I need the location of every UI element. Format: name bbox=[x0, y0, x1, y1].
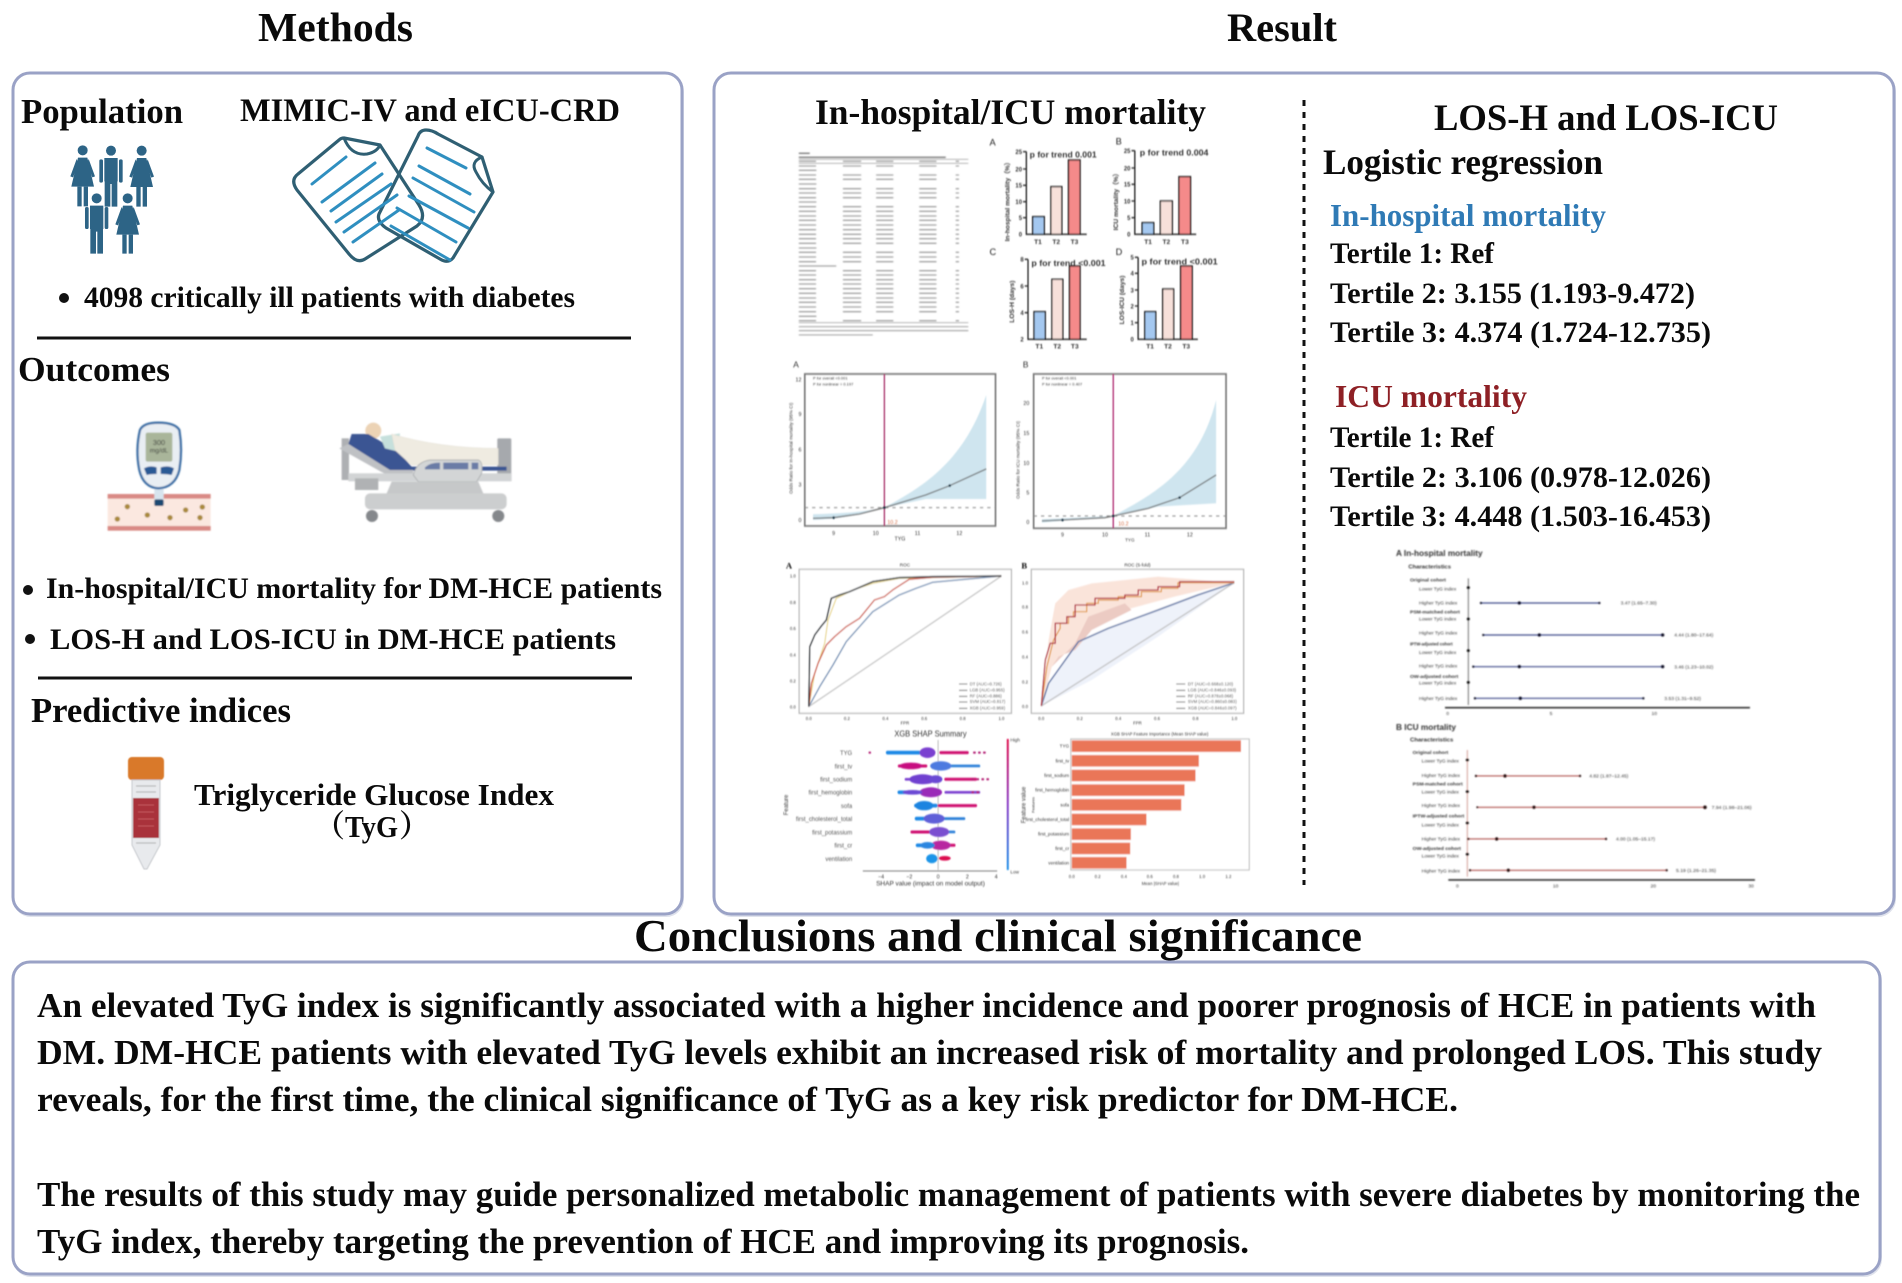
chart: ROC B: 0.6 bbox=[1022, 629, 1029, 634]
chart: restricted cubic spline A: A bbox=[793, 359, 799, 369]
chart: restricted cubic spline A: P for overall <0.001 bbox=[813, 375, 848, 380]
chart: ROC A bbox=[786, 560, 1011, 726]
chart: forest plot B ICU mortality: Characteristics bbox=[1410, 737, 1453, 743]
bar chart D: 3 bbox=[1131, 288, 1134, 294]
text block: in-hospital mortality results bbox=[1330, 197, 1711, 349]
chart: ROC B: 0.2 bbox=[1077, 716, 1083, 721]
chart: forest plot A in-hospital mortality: 0 bbox=[1446, 711, 1449, 717]
chart: tertile bars bbox=[990, 137, 1218, 351]
chart: ROC A: 0.4 bbox=[882, 716, 889, 721]
chart: ROC B: 0.8 bbox=[1193, 716, 1199, 721]
chart: SHAP summary: sofa bbox=[841, 804, 853, 810]
chart: restricted cubic spline B: B bbox=[1023, 359, 1029, 369]
chart: forest plot B ICU mortality: 4.00 (1.05–15.17) bbox=[1616, 837, 1655, 843]
text block: ICU mortality results: ICU mortality bbox=[1335, 378, 1527, 414]
icon: documents bbox=[294, 130, 493, 261]
chart: SHAP summary: 0 bbox=[937, 875, 940, 881]
text block: conclusion paragraph 1: reveals, for the first time, the clinical significance of TyG as a key risk predictor for DM-HCE. bbox=[37, 1080, 1458, 1119]
chart: forest plot B ICU mortality: Higher TyG index bbox=[1422, 803, 1460, 809]
chart: restricted cubic spline B: 10 bbox=[1023, 461, 1029, 467]
chart: ROC B: 0.4 bbox=[1022, 654, 1029, 659]
chart: restricted cubic spline A bbox=[789, 359, 996, 543]
chart: ROC A: 0.2 bbox=[844, 716, 850, 721]
chart: SHAP summary: Feature bbox=[784, 794, 790, 815]
chart: forest plot A in-hospital mortality: 5 bbox=[1550, 711, 1553, 717]
bar chart B: T1 bbox=[1144, 239, 1152, 246]
bar chart A: 5 bbox=[1019, 216, 1023, 222]
chart: SHAP feature importance: first_sodium bbox=[1044, 773, 1069, 778]
chart: SHAP summary: Feature value bbox=[1021, 786, 1027, 823]
chart: restricted cubic spline A: 9 bbox=[799, 412, 801, 418]
bar chart C: 8 bbox=[1020, 258, 1024, 264]
chart: tertile bars: A bbox=[990, 137, 997, 147]
chart: forest plot A in-hospital mortality bbox=[1396, 549, 1750, 717]
bar chart A: 25 bbox=[1015, 150, 1023, 156]
chart: SHAP summary: first_potassium bbox=[812, 830, 852, 836]
bullet: cohort size: 4098 critically ill patients with diabetes bbox=[84, 281, 575, 314]
chart: forest plot B ICU mortality: Lower TyG index bbox=[1422, 789, 1459, 795]
label: triglyceride glucose index: （ bbox=[314, 809, 345, 844]
text block: ICU mortality results: Tertile 2: 3.106 (0.978-12.026) bbox=[1330, 461, 1711, 494]
heading: mortality: In-hospital/ICU mortality bbox=[815, 92, 1206, 132]
chart: ROC B: 0.8 bbox=[1022, 605, 1029, 610]
chart: ROC A: ROC bbox=[900, 563, 911, 568]
chart: ROC B: ROC (5-fold) bbox=[1124, 563, 1151, 568]
chart: ROC A: A bbox=[786, 560, 793, 570]
bar chart B: ICU mortality（%） bbox=[1112, 170, 1120, 230]
chart: SHAP feature importance: 0.6 bbox=[1147, 874, 1153, 879]
chart: ROC A: 0.6 bbox=[790, 626, 796, 631]
chart: restricted cubic spline B: 12 bbox=[1187, 533, 1193, 539]
text block: conclusion paragraph 2: TyG index, thereby targeting the prevention of HCE and improving its prognosis. bbox=[37, 1222, 1249, 1261]
bar chart B: 10 bbox=[1124, 199, 1131, 205]
bar chart B: T2 bbox=[1162, 239, 1171, 246]
chart: SHAP summary: High bbox=[1010, 737, 1020, 742]
chart: forest plot B ICU mortality: 30 bbox=[1748, 883, 1754, 889]
chart: SHAP summary: Low bbox=[1010, 869, 1020, 874]
chart: tertile bars: C bbox=[990, 247, 997, 257]
panel: result bbox=[714, 73, 1895, 916]
bar chart D: p for trend <0.001 bbox=[1141, 257, 1218, 266]
chart: restricted cubic spline B: 15 bbox=[1023, 431, 1029, 437]
chart: ROC B: 0.6 bbox=[1154, 716, 1161, 721]
chart: SHAP summary: 2 bbox=[966, 875, 969, 881]
icon: people group bbox=[70, 145, 154, 254]
chart: forest plot B ICU mortality bbox=[1396, 723, 1755, 889]
chart: restricted cubic spline A: TYG bbox=[895, 537, 905, 543]
bar chart D: 0 bbox=[1131, 338, 1134, 344]
bar chart D: 5 bbox=[1131, 256, 1134, 262]
bar chart C: 4 bbox=[1020, 311, 1024, 317]
chart: ROC A: SVM (AUC=0.817) bbox=[970, 699, 1006, 704]
chart: ROC A: LGB (AUC=0.955) bbox=[970, 688, 1005, 693]
bar chart B: T3 bbox=[1181, 239, 1189, 246]
chart: SHAP feature importance bbox=[1025, 732, 1249, 886]
icon: glucose meter on blood vessel bbox=[108, 423, 211, 531]
chart: ROC B: 0.0 bbox=[1038, 716, 1045, 721]
chart: ROC A: FPR bbox=[901, 721, 909, 726]
bullet: mortality outcome: In-hospital/ICU mortality for DM-HCE patients bbox=[46, 572, 662, 605]
chart: forest plot B ICU mortality: B ICU mortality bbox=[1396, 723, 1457, 732]
text block: in-hospital mortality results: Tertile 1: Ref bbox=[1330, 237, 1495, 270]
bar chart D bbox=[1119, 256, 1218, 351]
bar chart B: 5 bbox=[1127, 216, 1131, 222]
chart: forest plot A in-hospital mortality: Lower TyG index bbox=[1419, 650, 1457, 656]
text block: conclusion paragraph 1 bbox=[37, 986, 1822, 1119]
bar chart D: T2 bbox=[1164, 344, 1172, 351]
bar chart C: T2 bbox=[1053, 344, 1061, 351]
chart: restricted cubic spline B: 10.2 bbox=[1118, 521, 1129, 527]
chart: ROC B: 0.2 bbox=[1022, 679, 1029, 684]
chart: SHAP feature importance: first_cr bbox=[1055, 846, 1070, 851]
chart: restricted cubic spline B: 5 bbox=[1026, 490, 1029, 496]
chart: SHAP summary: XGB SHAP Summary bbox=[894, 730, 967, 739]
chart: restricted cubic spline B: 10 bbox=[1102, 533, 1108, 539]
chart: forest plot A in-hospital mortality: Lower TyG index bbox=[1419, 617, 1457, 623]
heading: Methods: Methods bbox=[258, 4, 413, 50]
chart: SHAP summary: −2 bbox=[906, 875, 912, 881]
chart: forest plot A in-hospital mortality: IPTW-adjusted cohort bbox=[1410, 641, 1453, 647]
chart: forest plot A in-hospital mortality: Higher TyG index bbox=[1419, 696, 1458, 702]
heading: population: Population bbox=[21, 92, 183, 131]
chart: forest plot A in-hospital mortality: Original cohort bbox=[1410, 578, 1446, 584]
chart: SHAP feature importance: Mean |SHAP value| bbox=[1142, 881, 1179, 886]
icon: glucose meter on blood vessel: mg/dL bbox=[150, 448, 169, 455]
chart: ROC A: XGB (AUC=0.959) bbox=[970, 705, 1006, 710]
bar chart A: 15 bbox=[1015, 184, 1023, 190]
chart: ROC A: RF (AUC=0.886) bbox=[970, 693, 1002, 698]
chart: SHAP feature importance: sofa bbox=[1060, 802, 1070, 807]
chart: SHAP feature importance: XGB SHAP Feature Importance (Mean SHAP value) bbox=[1111, 732, 1209, 738]
chart: ROC A: 0.2 bbox=[790, 678, 796, 683]
text block: conclusion paragraph 2: The results of this study may guide personalized metabolic management of patients with severe diabetes by monitoring the bbox=[37, 1175, 1860, 1214]
heading: Result: Result bbox=[1227, 5, 1338, 50]
chart: restricted cubic spline A: 10 bbox=[873, 531, 879, 537]
bar chart D: 4 bbox=[1131, 272, 1134, 278]
bar chart C: p for trend <0.001 bbox=[1031, 259, 1106, 268]
bar chart A: 0 bbox=[1019, 233, 1023, 239]
text block: conclusion paragraph 1: An elevated TyG index is significantly associated with a higher incidence and poorer prognosis of HCE in patients with bbox=[37, 986, 1816, 1025]
text block: in-hospital mortality results: Tertile 2: 3.155 (1.193-9.472) bbox=[1330, 277, 1695, 310]
bar chart A: 20 bbox=[1015, 167, 1023, 173]
chart: restricted cubic spline A: 11 bbox=[915, 531, 920, 537]
chart: forest plot A in-hospital mortality: 3.46 (1.23–10.02) bbox=[1674, 664, 1714, 670]
bar chart A: In-hospital mortality（%） bbox=[1003, 159, 1011, 241]
chart: SHAP summary: first_cholesterol_total bbox=[796, 817, 852, 823]
chart: restricted cubic spline B: P for overall <0.001 bbox=[1042, 375, 1077, 380]
bullet: length of stay outcome: LOS-H and LOS-ICU in DM-HCE patients bbox=[50, 623, 616, 656]
panel: methods bbox=[13, 73, 683, 916]
bar chart C: LOS-H (days) bbox=[1009, 281, 1016, 323]
chart: forest plot B ICU mortality: 5.19 (1.26–21.35) bbox=[1676, 868, 1716, 874]
chart: forest plot A in-hospital mortality: 3.47 (1.65–7.30) bbox=[1621, 601, 1657, 607]
bar chart C bbox=[1009, 258, 1106, 351]
text block: in-hospital mortality results: Tertile 3: 4.374 (1.724-12.735) bbox=[1330, 316, 1711, 349]
chart: forest plot B ICU mortality: Lower TyG index bbox=[1422, 758, 1459, 764]
chart: ROC B: 1.0 bbox=[1231, 716, 1238, 721]
chart: SHAP feature importance: Features bbox=[1030, 797, 1035, 813]
chart: restricted cubic spline B bbox=[1015, 359, 1226, 542]
chart: forest plot A in-hospital mortality: Characteristics bbox=[1408, 565, 1451, 571]
chart: SHAP feature importance: TYG bbox=[1060, 744, 1070, 749]
bar chart C: 6 bbox=[1020, 284, 1024, 290]
bar chart A: 10 bbox=[1015, 200, 1023, 206]
chart: SHAP summary: SHAP value (impact on model output) bbox=[876, 881, 985, 888]
label: triglyceride glucose index bbox=[194, 777, 554, 844]
chart: SHAP summary bbox=[784, 730, 1027, 888]
chart: SHAP summary: first_sodium bbox=[820, 778, 852, 784]
chart: SHAP summary: first_cr bbox=[834, 844, 852, 850]
chart: ROC A: 0.0 bbox=[790, 705, 796, 710]
bar chart B bbox=[1112, 149, 1209, 246]
icon: patient in hospital bed bbox=[339, 423, 512, 522]
bar chart D: LOS-ICU (days) bbox=[1119, 276, 1126, 324]
chart: ROC B: RF (AUC=0.878±0.068) bbox=[1188, 693, 1234, 698]
chart: SHAP summary: first_hemoglobin bbox=[809, 791, 852, 797]
chart: forest plot A in-hospital mortality: 4.44 (1.80–17.64) bbox=[1674, 633, 1714, 639]
panel: conclusions bbox=[13, 962, 1881, 1276]
heading: predictive indices: Predictive indices bbox=[31, 691, 291, 730]
chart: forest plot B ICU mortality: 0 bbox=[1456, 883, 1459, 889]
chart: ROC B: SVM (AUC=0.860±0.083) bbox=[1188, 699, 1237, 704]
chart: forest plot B ICU mortality: IPTW-adjusted cohort bbox=[1413, 814, 1465, 820]
heading: length of stay: LOS-H and LOS-ICU bbox=[1434, 97, 1778, 138]
label: triglyceride glucose index: ） bbox=[399, 809, 430, 844]
chart: SHAP feature importance: ventilation bbox=[1048, 860, 1070, 865]
chart: restricted cubic spline B: P for nonlinear = 0.407 bbox=[1042, 381, 1083, 386]
chart: tertile bars: B bbox=[1116, 137, 1122, 147]
text block: in-hospital mortality results: In-hospital mortality bbox=[1330, 197, 1606, 233]
chart: ROC B: LGB (AUC=0.846±0.093) bbox=[1188, 688, 1237, 693]
chart: restricted cubic spline A: 9 bbox=[832, 531, 835, 537]
chart: forest plot A in-hospital mortality: Higher TyG index bbox=[1419, 631, 1458, 637]
chart: SHAP summary: ventilation bbox=[825, 857, 852, 863]
chart: forest plot B ICU mortality: Lower TyG index bbox=[1422, 822, 1459, 828]
chart: SHAP feature importance: first_potassium bbox=[1038, 832, 1069, 837]
chart: SHAP feature importance: 0.8 bbox=[1173, 874, 1180, 879]
chart: forest plot A in-hospital mortality: Lower TyG index bbox=[1419, 586, 1457, 592]
heading: data sources: MIMIC-IV and eICU-CRD bbox=[240, 93, 620, 129]
chart: tertile bars: D bbox=[1116, 247, 1123, 257]
chart: restricted cubic spline A: 0 bbox=[799, 518, 801, 524]
table: baseline characteristics bbox=[799, 153, 968, 335]
bar chart A: T3 bbox=[1071, 239, 1079, 246]
chart: SHAP feature importance: 0.2 bbox=[1095, 874, 1101, 879]
chart: SHAP feature importance: 1.0 bbox=[1199, 874, 1206, 879]
text block: conclusion paragraph 1: DM. DM-HCE patients with elevated TyG levels exhibit an increased risk of mortality and prolonged LOS. This study bbox=[37, 1033, 1822, 1072]
bar chart D: 2 bbox=[1131, 304, 1134, 310]
chart: ROC A: 0.8 bbox=[960, 716, 966, 721]
chart: SHAP feature importance: 0.4 bbox=[1121, 874, 1127, 879]
chart: forest plot B ICU mortality: Higher TyG index bbox=[1422, 836, 1460, 842]
chart: ROC A: 0.6 bbox=[921, 716, 928, 721]
chart: restricted cubic spline B: Odds Ratio for ICU mortality (95% CI) bbox=[1015, 421, 1020, 499]
chart: SHAP summary: 4 bbox=[995, 875, 998, 881]
chart: forest plot A in-hospital mortality: Lower TyG index bbox=[1419, 681, 1457, 687]
bar chart D: T3 bbox=[1182, 344, 1190, 351]
bar chart A: p for trend 0.001 bbox=[1030, 150, 1097, 159]
chart: ROC A: 0.4 bbox=[790, 652, 796, 657]
chart: forest plot A in-hospital mortality: OW-adjusted cohort bbox=[1410, 674, 1459, 680]
chart: ROC A: 1.0 bbox=[998, 716, 1005, 721]
chart: forest plot B ICU mortality: Higher TyG index bbox=[1422, 773, 1460, 779]
chart: restricted cubic spline A: 3 bbox=[799, 483, 801, 489]
bar chart C: T1 bbox=[1035, 344, 1043, 351]
bar chart A: T2 bbox=[1052, 239, 1060, 246]
chart: restricted cubic spline A: P for nonlinear = 0.197 bbox=[813, 381, 854, 386]
chart: ROC B: 0.0 bbox=[1022, 704, 1029, 709]
label: triglyceride glucose index: Triglyceride Glucose Index bbox=[194, 777, 554, 812]
bar chart B: 25 bbox=[1124, 149, 1131, 155]
chart: forest plot B ICU mortality: Higher TyG index bbox=[1422, 869, 1460, 875]
chart: SHAP feature importance: first_hemoglobin bbox=[1035, 788, 1070, 793]
chart: restricted cubic spline B: 9 bbox=[1061, 533, 1064, 539]
chart: forest plot B ICU mortality: 10 bbox=[1553, 883, 1559, 889]
chart: forest plot B ICU mortality: OW-adjusted cohort bbox=[1413, 846, 1461, 852]
bar chart B: 0 bbox=[1127, 233, 1131, 239]
text block: ICU mortality results bbox=[1330, 378, 1711, 533]
chart: SHAP summary: −4 bbox=[878, 875, 884, 881]
chart: restricted cubic spline B: 0 bbox=[1026, 520, 1029, 526]
icon: blood tube bbox=[128, 757, 164, 869]
chart: ROC A: 1.0 bbox=[790, 574, 796, 579]
chart: forest plot A in-hospital mortality: 10 bbox=[1652, 711, 1657, 717]
chart: forest plot B ICU mortality: Lower TyG index bbox=[1422, 853, 1459, 859]
chart: ROC A: DT (AUC=0.726) bbox=[970, 681, 1002, 686]
chart: ROC B: FPR bbox=[1133, 721, 1142, 726]
chart: SHAP feature importance: 1.2 bbox=[1225, 874, 1232, 879]
bar chart D: T1 bbox=[1146, 344, 1154, 351]
chart: forest plot B ICU mortality: PSM-matched cohort bbox=[1413, 782, 1463, 788]
chart: ROC B: XGB (AUC=0.846±0.097) bbox=[1188, 705, 1237, 710]
chart: SHAP feature importance: first_cholesterol_total bbox=[1025, 817, 1069, 822]
chart: restricted cubic spline A: Odds Ratio for In-hospital mortality (95% CI) bbox=[789, 402, 794, 494]
chart: ROC B: DT (AUC=0.668±0.120) bbox=[1188, 681, 1234, 686]
text block: ICU mortality results: Tertile 3: 4.448 (1.503-16.453) bbox=[1330, 500, 1711, 533]
chart: forest plot B ICU mortality: Original cohort bbox=[1413, 750, 1449, 756]
chart: SHAP summary: first_tv bbox=[835, 764, 852, 770]
chart: SHAP feature importance: first_tv bbox=[1056, 758, 1070, 763]
chart: SHAP feature importance: 0.0 bbox=[1069, 874, 1075, 879]
chart: forest plot A in-hospital mortality: Higher TyG index bbox=[1419, 664, 1458, 670]
dashed divider bbox=[1302, 100, 1306, 885]
chart: forest plot A in-hospital mortality: Higher TyG index bbox=[1419, 600, 1458, 606]
chart: restricted cubic spline B: 20 bbox=[1023, 401, 1029, 407]
chart: restricted cubic spline A: 12 bbox=[796, 377, 801, 383]
text block: conclusion paragraph 2 bbox=[37, 1175, 1860, 1261]
chart: forest plot A in-hospital mortality: A In-hospital mortality bbox=[1396, 549, 1483, 558]
chart: restricted cubic spline A: 12 bbox=[956, 531, 962, 537]
bar chart D: 1 bbox=[1131, 321, 1134, 327]
chart: forest plot A in-hospital mortality: 3.53 (1.31–9.52) bbox=[1664, 696, 1701, 702]
bar chart B: 20 bbox=[1124, 166, 1131, 172]
chart: forest plot B ICU mortality: 20 bbox=[1651, 883, 1656, 889]
chart: restricted cubic spline B: TYG bbox=[1125, 537, 1135, 542]
bar chart A bbox=[1003, 150, 1097, 246]
chart: forest plot B ICU mortality: 7.94 (1.98–21.06) bbox=[1712, 805, 1752, 811]
chart: forest plot A in-hospital mortality: PSM-matched cohort bbox=[1410, 609, 1460, 615]
chart: ROC B bbox=[1021, 560, 1244, 726]
bar chart B: 15 bbox=[1124, 183, 1131, 189]
chart: ROC B: 0.4 bbox=[1115, 716, 1122, 721]
chart: forest plot B ICU mortality: 4.82 (1.87–12.45) bbox=[1589, 774, 1629, 780]
icon: glucose meter on blood vessel: 300 bbox=[153, 438, 165, 447]
chart: ROC B: 1.0 bbox=[1022, 580, 1029, 585]
bar chart A: T1 bbox=[1034, 239, 1042, 246]
chart: restricted cubic spline B: 11 bbox=[1145, 533, 1150, 539]
heading: logistic regression: Logistic regression bbox=[1323, 142, 1603, 182]
chart: SHAP summary: TYG bbox=[840, 751, 853, 757]
label: triglyceride glucose index: TyG bbox=[345, 809, 398, 844]
text block: ICU mortality results: Tertile 1: Ref bbox=[1330, 421, 1495, 454]
heading: outcomes: Outcomes bbox=[18, 350, 170, 389]
heading: conclusions: Conclusions and clinical significance bbox=[634, 910, 1362, 961]
bar chart C: 2 bbox=[1020, 338, 1024, 344]
bar chart C: T3 bbox=[1071, 344, 1079, 351]
chart: restricted cubic spline A: 6 bbox=[799, 448, 801, 454]
chart: ROC B: B bbox=[1021, 560, 1027, 570]
chart: ROC A: 0.0 bbox=[806, 716, 812, 721]
chart: restricted cubic spline A: 10.2 bbox=[887, 520, 898, 526]
bar chart B: p for trend 0.004 bbox=[1140, 149, 1209, 158]
chart: ROC A: 0.8 bbox=[790, 600, 796, 605]
